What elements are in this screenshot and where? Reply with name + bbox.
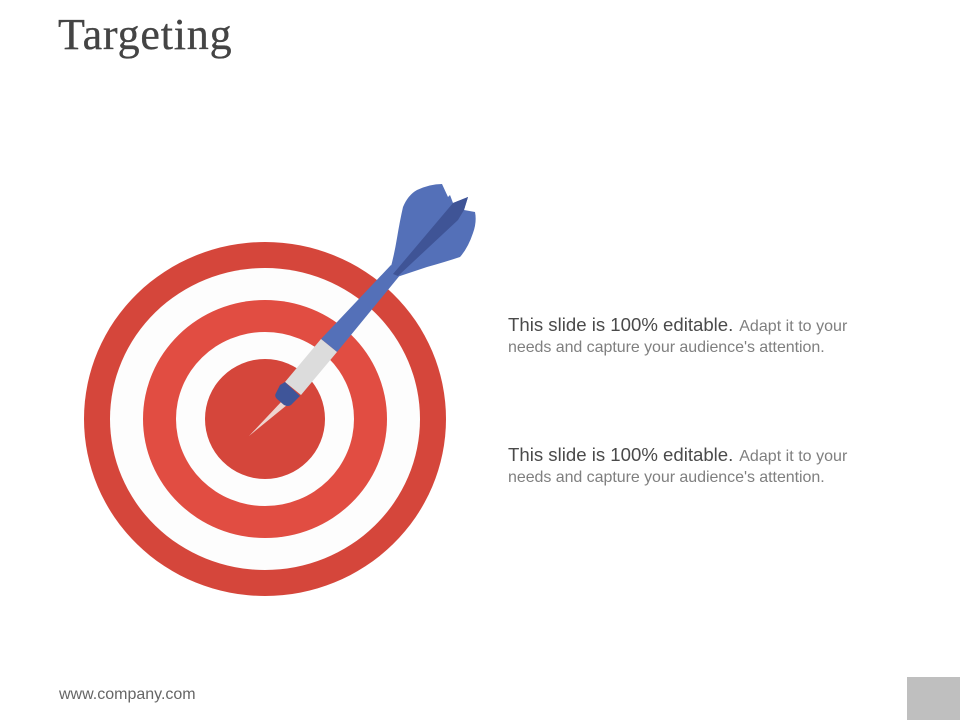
text block 2: This slide is 100% editable. Adapt it to your: [508, 444, 847, 465]
title: Targeting: [58, 10, 232, 59]
footer url: www.company.com: [59, 686, 196, 703]
dart grip: [275, 382, 300, 406]
dart barrel: [285, 339, 337, 395]
text block 2: needs and capture your audience's attention.: [508, 468, 825, 486]
dart shaft: [321, 265, 401, 352]
footer page box: [907, 677, 960, 720]
text block 1: [508, 314, 848, 356]
text block 1: needs and capture your audience's attention.: [508, 338, 825, 356]
dart flight centre: [393, 197, 468, 276]
target: [84, 242, 446, 596]
dart needle: [249, 401, 287, 436]
text block 1: This slide is 100% editable. Adapt it to your: [508, 314, 847, 335]
dart flight: [390, 184, 476, 277]
text block 2: [508, 444, 848, 486]
dart: [249, 184, 476, 436]
